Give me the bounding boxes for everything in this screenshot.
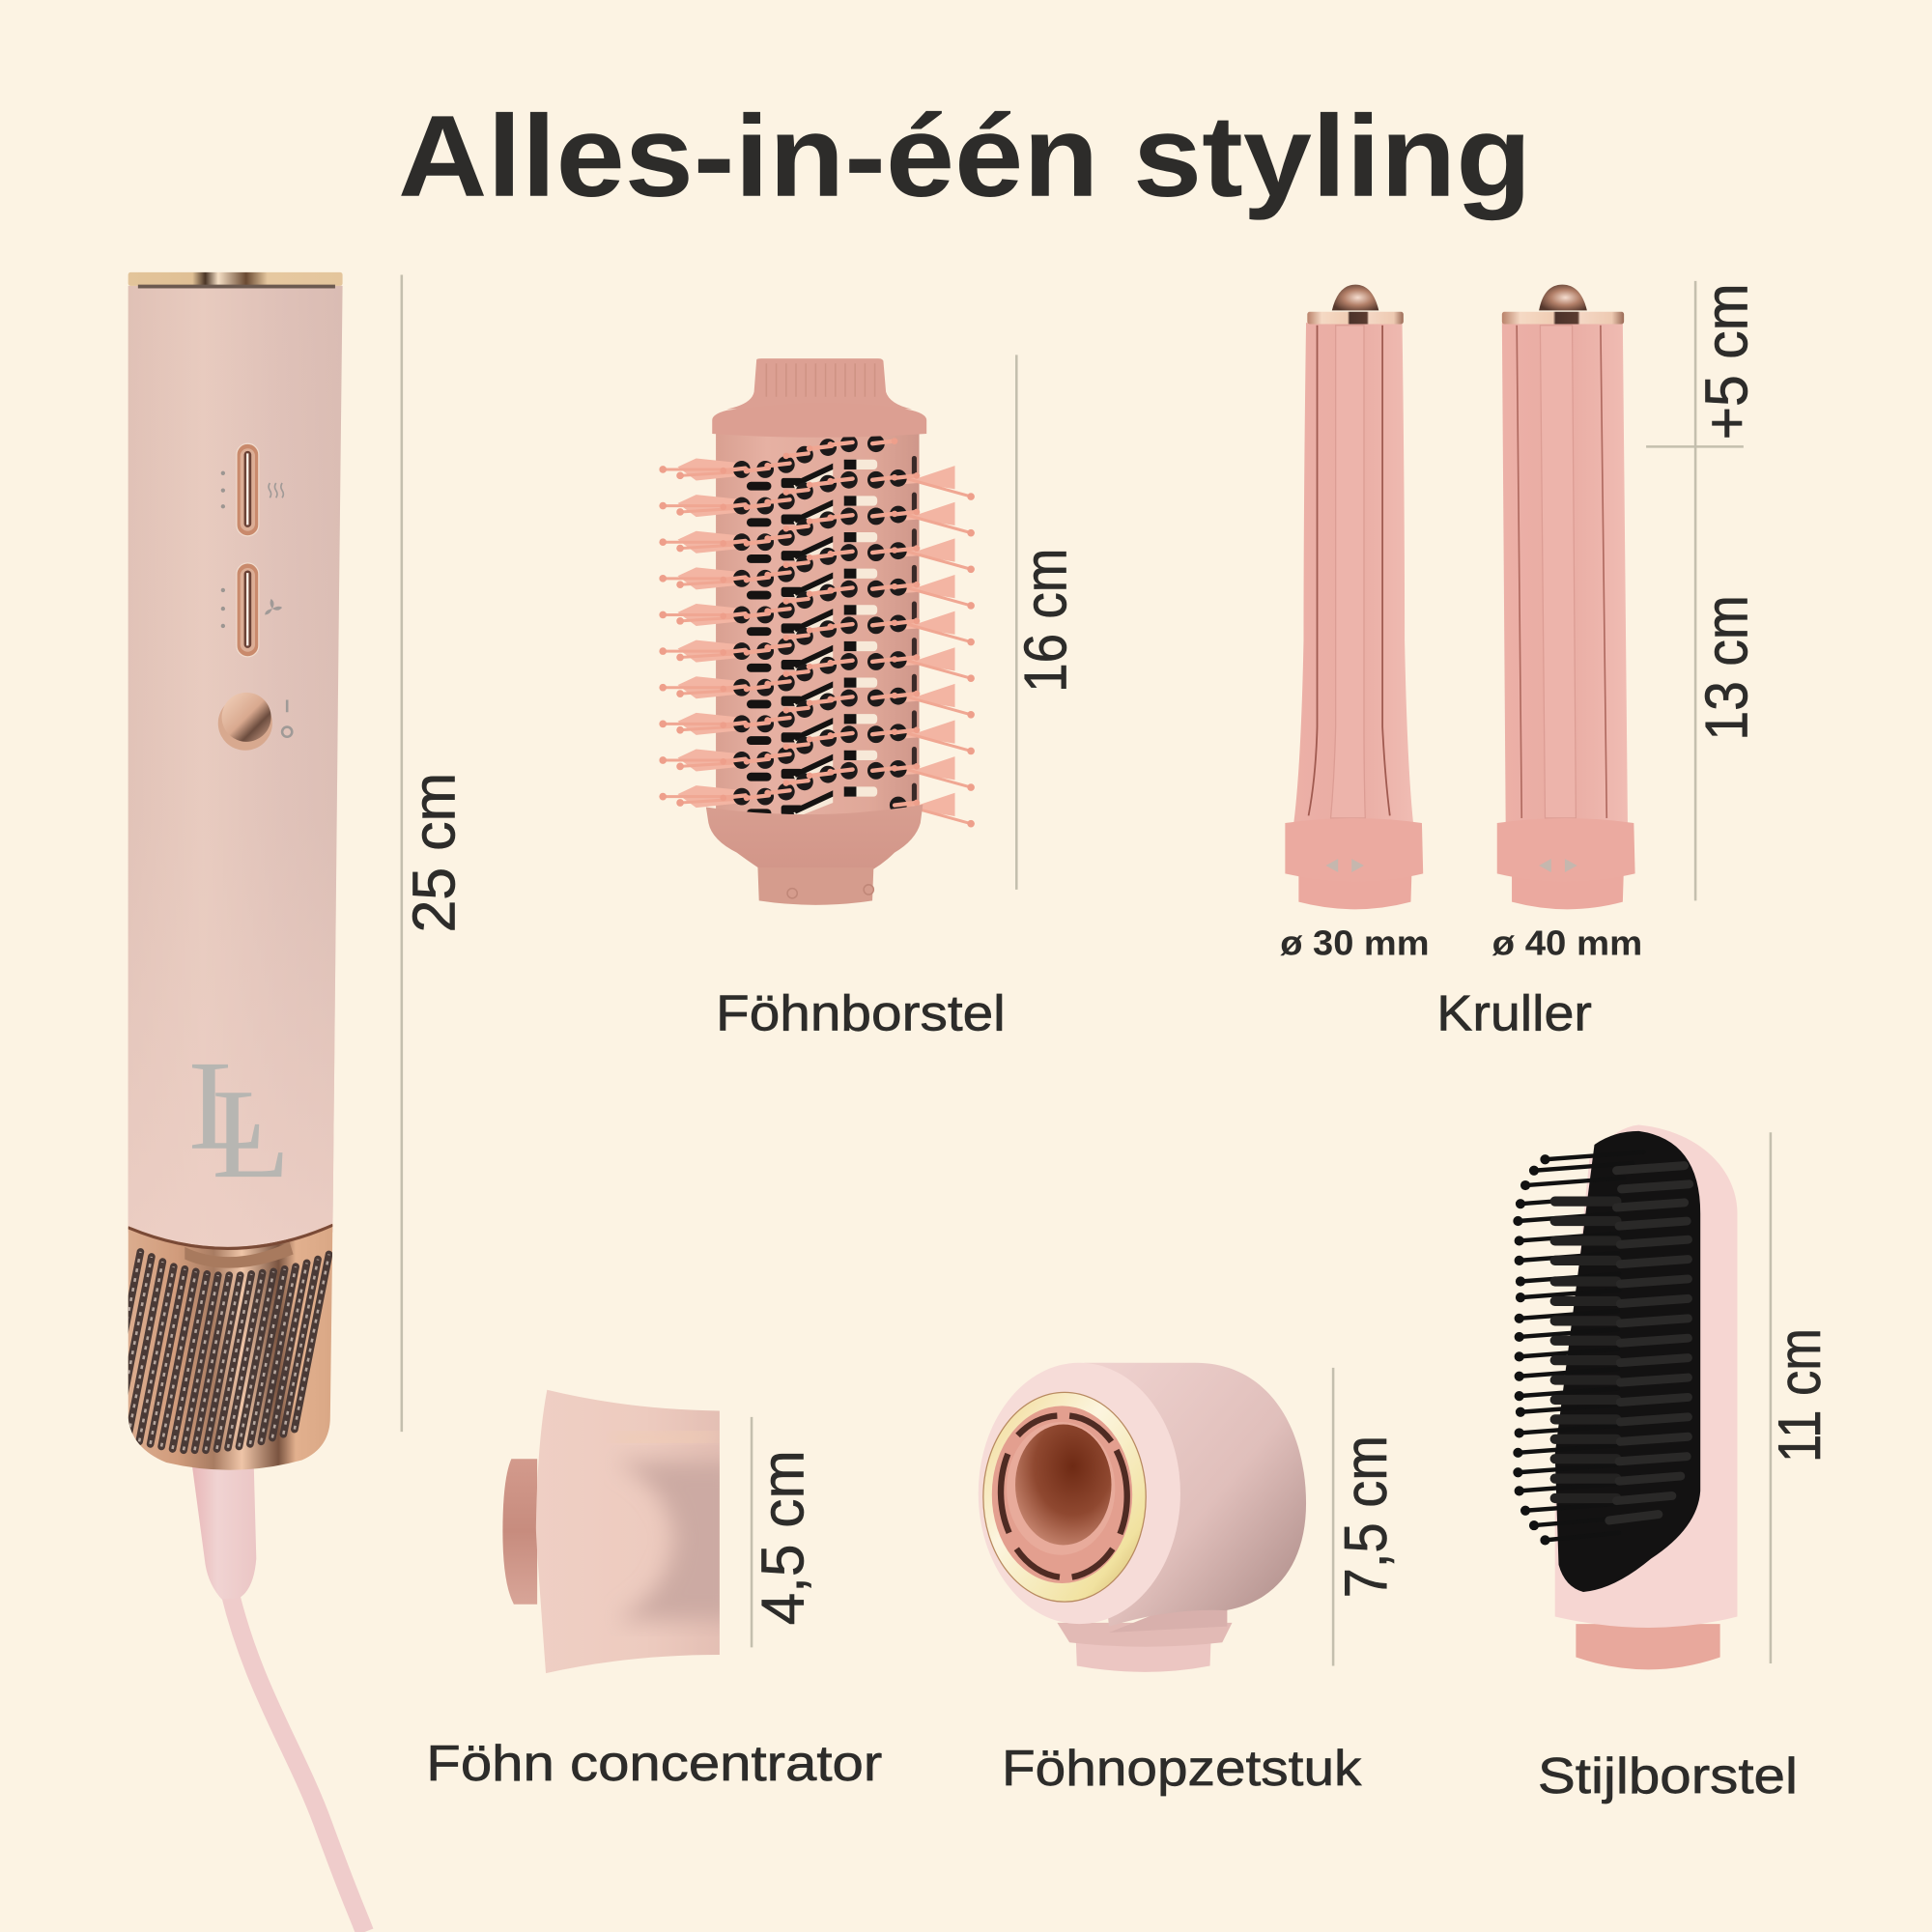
fan button bbox=[221, 563, 259, 657]
cone bbox=[536, 1390, 720, 1673]
dimension: +5 cm and 13 cm bbox=[1646, 281, 1761, 900]
panel highlight bbox=[1540, 326, 1576, 818]
product: Föhnborstel brush bbox=[659, 358, 975, 905]
title: Alles-in-één styling bbox=[398, 92, 1531, 221]
tip dome bbox=[1332, 285, 1378, 310]
dimension: 4,5 cm: 4,5 cm bbox=[750, 1450, 817, 1625]
arrows bbox=[1539, 859, 1577, 872]
nub bbox=[502, 1459, 537, 1605]
top gold cap bbox=[128, 272, 343, 288]
label: ø 40 mm: ø 40 mm bbox=[1492, 924, 1642, 963]
label: ø 30 mm: ø 30 mm bbox=[1280, 924, 1430, 963]
dimension: +5 cm and 13 cm: 13 cm bbox=[1693, 595, 1761, 741]
logo bbox=[188, 1035, 290, 1205]
neck bbox=[1298, 863, 1412, 909]
icon: fan bbox=[265, 599, 282, 614]
connector bbox=[1109, 1587, 1227, 1633]
dimension: +5 cm and 13 cm: +5 cm bbox=[1693, 283, 1761, 440]
gold ring bbox=[983, 1392, 1146, 1602]
dimension: 25 cm: 25 cm bbox=[401, 773, 469, 933]
body bbox=[1293, 323, 1413, 823]
dimension: 16 cm: 16 cm bbox=[1011, 549, 1079, 693]
shell bbox=[1555, 1125, 1737, 1628]
logo: L bbox=[188, 1035, 267, 1177]
neck bbox=[1512, 863, 1624, 909]
metal rim bbox=[1502, 312, 1624, 324]
funnel shadow bbox=[1015, 1424, 1112, 1545]
label: Föhn concentrator: Föhn concentrator bbox=[426, 1736, 882, 1792]
power cord bbox=[192, 1466, 365, 1932]
logo: L bbox=[212, 1063, 290, 1205]
panel lines bbox=[1309, 326, 1390, 815]
body bbox=[1502, 323, 1628, 823]
base collar bbox=[1497, 818, 1635, 882]
product: Föhnopzetstuk bbox=[979, 1363, 1306, 1672]
knob ribs bbox=[766, 363, 875, 397]
arrows bbox=[1325, 859, 1364, 872]
heat button bbox=[221, 443, 259, 536]
cone shading bbox=[626, 1455, 720, 1627]
base bbox=[1576, 1624, 1720, 1669]
label: Föhnopzetstuk: Föhnopzetstuk bbox=[1002, 1741, 1362, 1797]
neck bbox=[757, 867, 873, 905]
tip dome bbox=[1539, 285, 1587, 310]
product: 40 mm curler bbox=[1497, 285, 1635, 909]
lower flange bbox=[706, 805, 923, 870]
label: Föhnborstel: Föhnborstel bbox=[716, 985, 1006, 1041]
panel lines bbox=[1517, 326, 1606, 818]
metal rim bbox=[1307, 312, 1404, 324]
power knob bbox=[218, 693, 292, 751]
base collar bbox=[1285, 818, 1423, 882]
product: 30 mm curler bbox=[1285, 285, 1423, 909]
cylinder bbox=[716, 426, 920, 815]
top knob bbox=[727, 358, 912, 409]
label: Kruller: Kruller bbox=[1436, 985, 1592, 1041]
middle bristles bbox=[1555, 1202, 1616, 1498]
vent ring bbox=[992, 1406, 1132, 1583]
dimension: 11 cm: 11 cm bbox=[1766, 1328, 1833, 1463]
dimension: 7,5 cm: 7,5 cm bbox=[1332, 1435, 1400, 1598]
base bbox=[1076, 1633, 1211, 1672]
front cap bbox=[979, 1363, 1180, 1624]
handle body lower tint bbox=[128, 286, 343, 1257]
outer bristles bbox=[1518, 1152, 1644, 1540]
black plate bbox=[1555, 1131, 1700, 1592]
panel highlight bbox=[1331, 326, 1365, 818]
icon: steam bbox=[269, 483, 283, 497]
vent slots bbox=[1001, 1416, 1127, 1577]
rose gold vented collar bbox=[128, 1223, 332, 1470]
inner funnel bbox=[1007, 1422, 1115, 1555]
top brim bbox=[712, 403, 926, 438]
product: Föhn concentrator bbox=[502, 1390, 739, 1673]
drum bbox=[1084, 1363, 1306, 1627]
handle body bbox=[128, 286, 343, 1257]
product: main handle with cord bbox=[106, 272, 365, 1932]
inner bristles bbox=[1609, 1166, 1690, 1520]
flange bbox=[1057, 1623, 1233, 1647]
bristle rows bbox=[659, 435, 975, 828]
label: Stijlborstel: Stijlborstel bbox=[1538, 1748, 1798, 1804]
product: Stijlborstel bbox=[1518, 1125, 1737, 1669]
